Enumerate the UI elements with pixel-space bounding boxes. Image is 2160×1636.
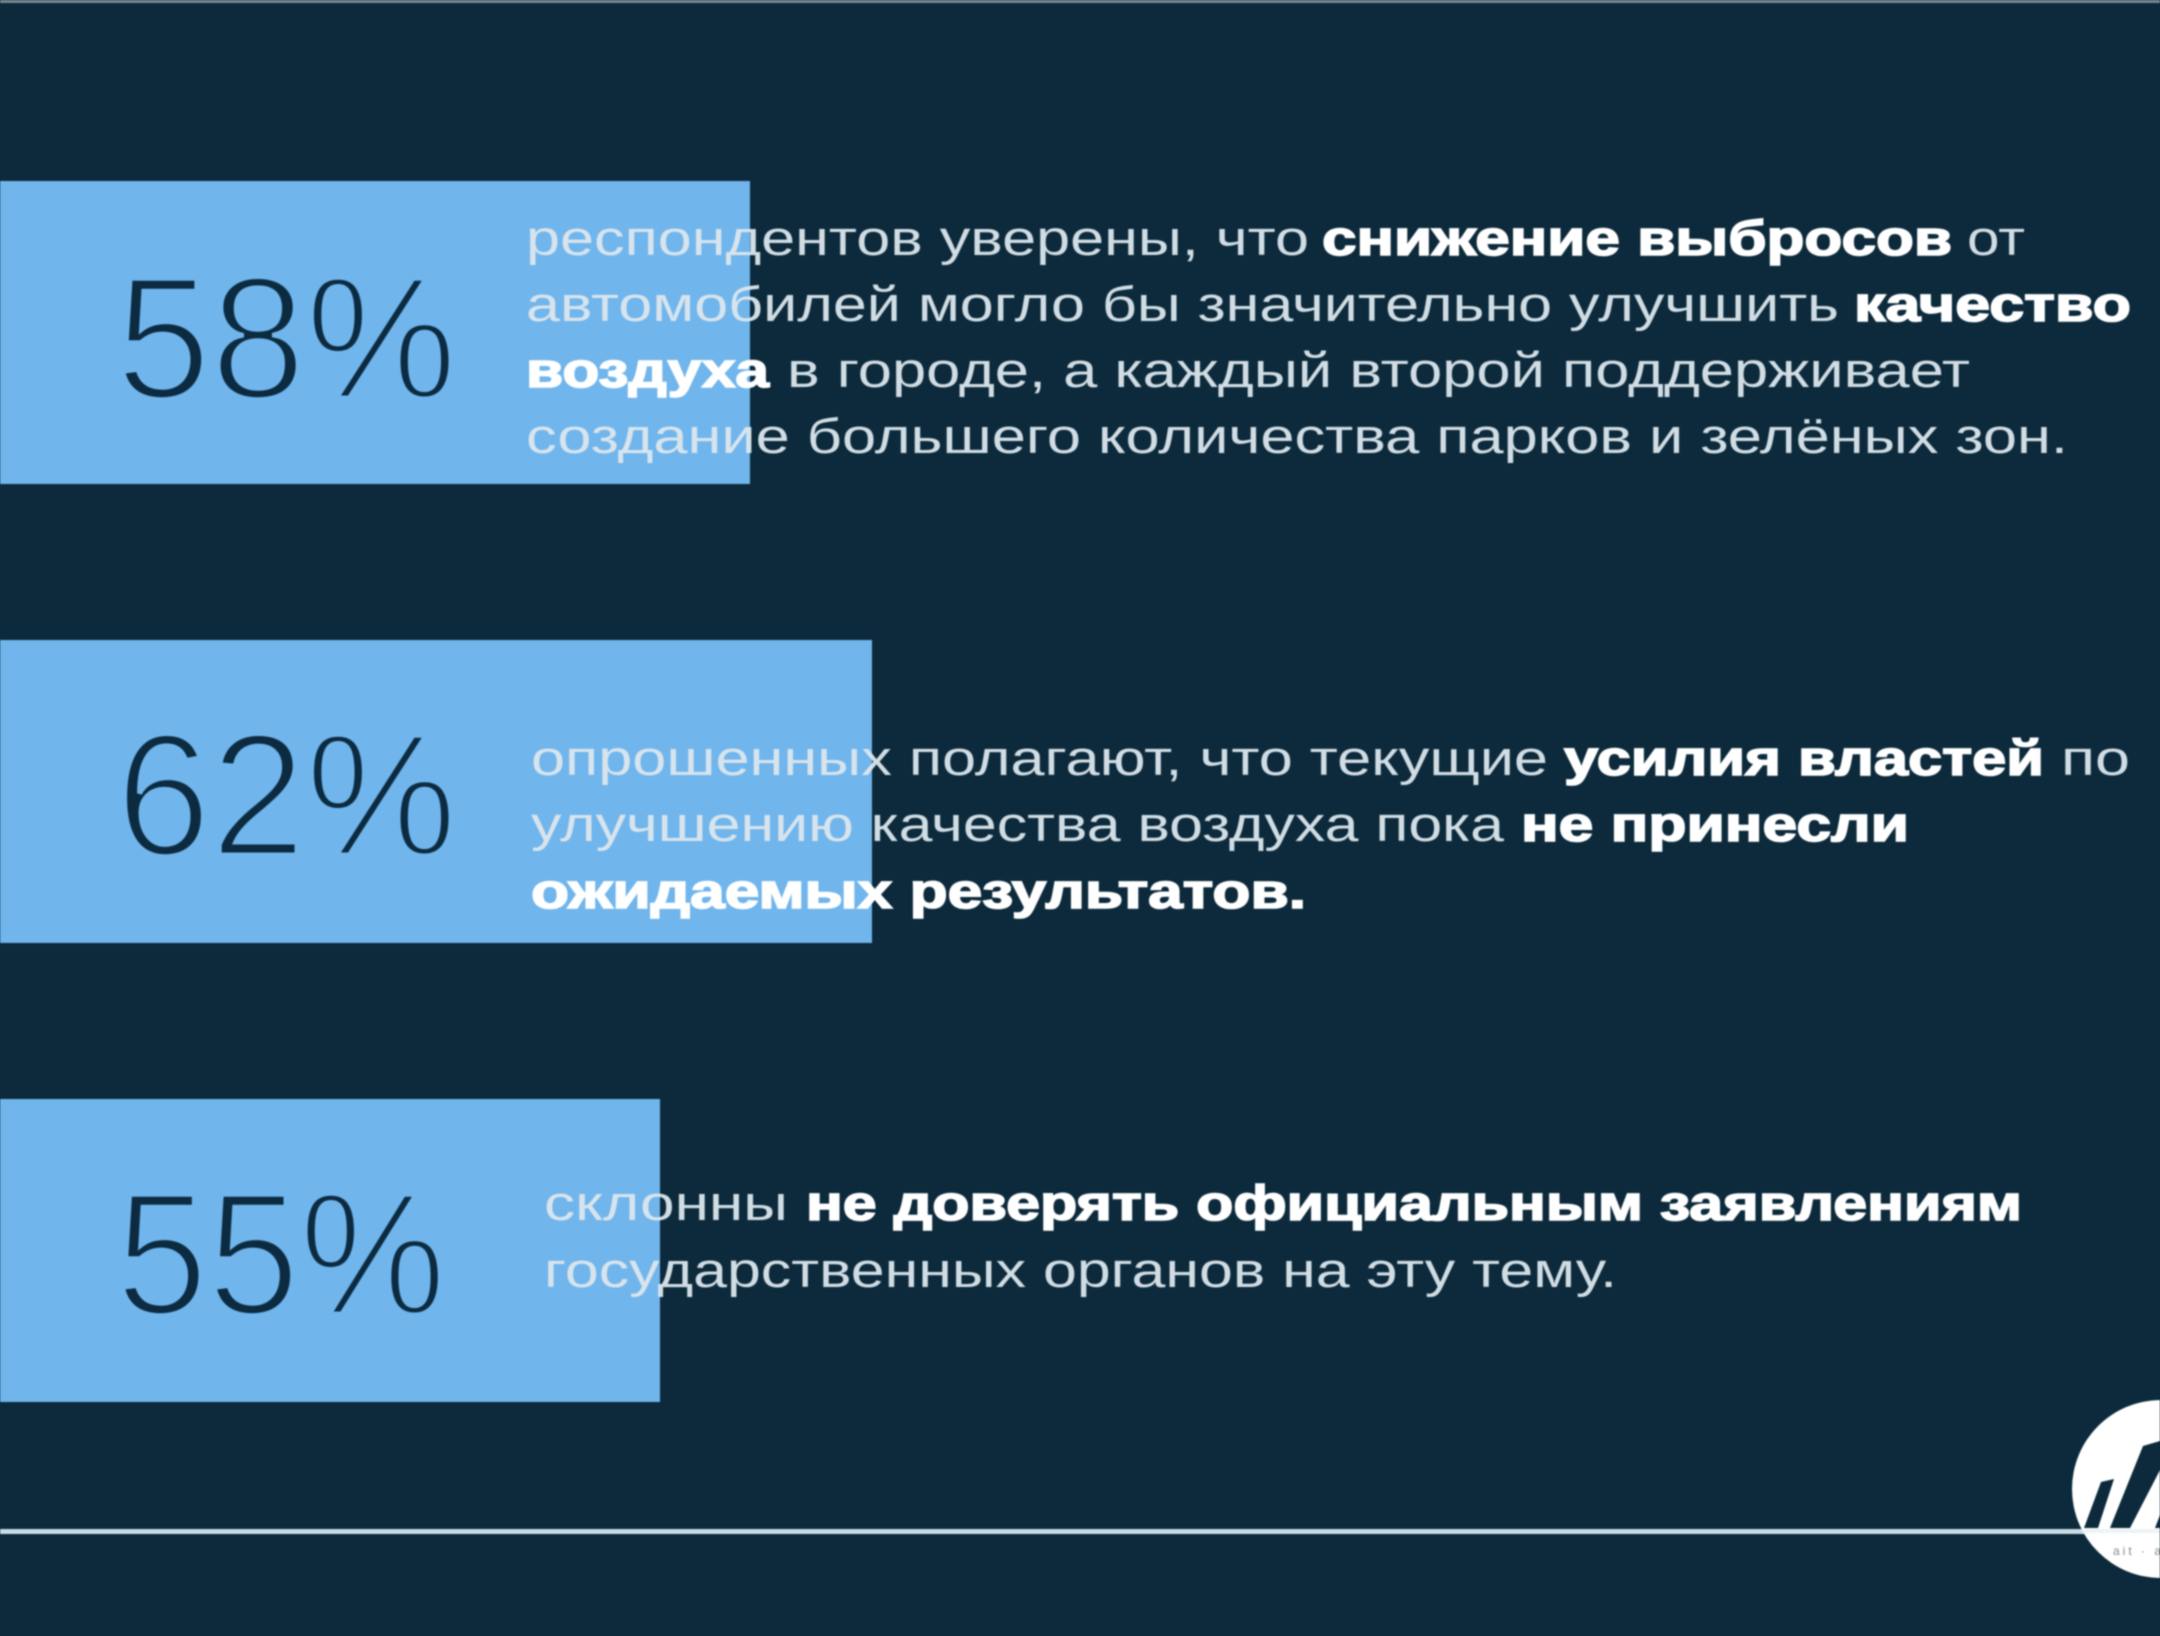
text block: 58% description: от bbox=[1967, 212, 2025, 266]
bar: 62% bbox=[0, 640, 872, 943]
text block: 58% description: автомобилей могло бы значительно улучшить bbox=[526, 278, 1839, 332]
panel: 58% statistic bbox=[0, 181, 2131, 484]
panel: 62% statistic bbox=[0, 640, 2130, 943]
number: 62%: 62% bbox=[116, 697, 457, 892]
footer rule bbox=[0, 1529, 2090, 1534]
text block: 58% description bbox=[526, 212, 2131, 464]
panel: 55% statistic bbox=[0, 1099, 2022, 1402]
text block: 58% description: в городе, а каждый второй поддерживает bbox=[787, 344, 1970, 398]
text block: 62% description bbox=[531, 732, 2130, 919]
number: 58%: 58% bbox=[116, 240, 457, 435]
text block: 58% description: респондентов уверены, что bbox=[526, 212, 1309, 266]
text block: 62% description: опрошенных полагают, что текущие bbox=[531, 732, 1548, 786]
text block: 62% description: не принесли bbox=[1521, 798, 1909, 852]
text block: 62% description: ожидаемых результатов. bbox=[531, 865, 1306, 919]
text block: 55% description: не доверять официальным заявлениям bbox=[806, 1177, 2022, 1231]
icon: logo badge bbox=[2072, 1400, 2160, 1578]
text block: 62% description: по bbox=[2061, 732, 2130, 786]
text block: 62% description: усилия властей bbox=[1564, 732, 2044, 786]
text block: 58% description: снижение выбросов bbox=[1322, 212, 1952, 266]
text block: 58% description: качество bbox=[1854, 278, 2131, 332]
bar: 55% bbox=[0, 1099, 660, 1402]
text block: 55% description: склонны bbox=[544, 1177, 788, 1231]
text block: 62% description: улучшению качества воздуха пока bbox=[531, 798, 1505, 852]
text block: 58% description: воздуха bbox=[526, 344, 770, 398]
number: 55%: 55% bbox=[116, 1156, 446, 1351]
text block: 55% description: государственных органов на эту тему. bbox=[544, 1244, 1617, 1298]
text block: 58% description: создание большего количества парков и зелёных зон. bbox=[526, 410, 2068, 464]
bar: 58% bbox=[0, 181, 750, 484]
text block: 55% description bbox=[544, 1177, 2022, 1298]
